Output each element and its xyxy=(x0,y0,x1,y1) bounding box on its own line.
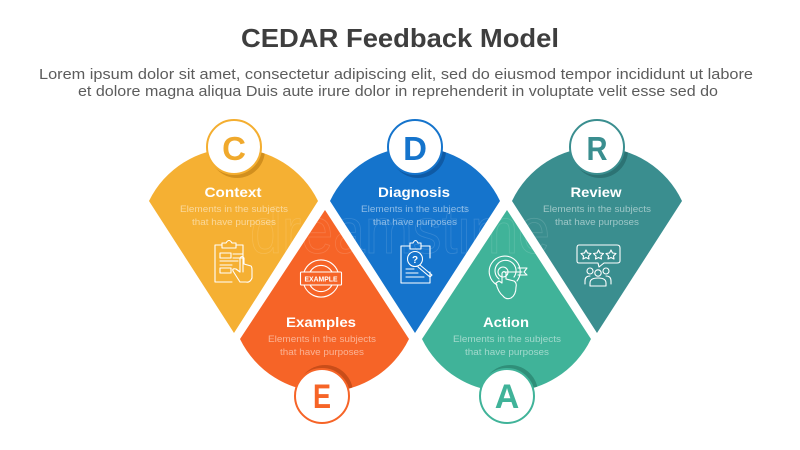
subtitle: Lorem ipsum dolor sit amet, consectetur adipiscing elit, sed do eiusmod tempor incididunt ut labore xyxy=(39,66,753,83)
review heading: Review xyxy=(570,184,622,200)
review description: that have purposes xyxy=(555,217,640,227)
review badge: R xyxy=(586,130,608,167)
examples heading: Examples xyxy=(286,314,356,330)
action shape xyxy=(422,210,591,392)
review shape xyxy=(512,147,682,333)
diagnosis badge: D xyxy=(403,130,427,167)
icon: example stamp: EXAMPLE xyxy=(304,274,338,284)
context shape xyxy=(149,148,318,333)
examples description xyxy=(268,334,377,357)
action description: that have purposes xyxy=(465,347,550,357)
examples badge xyxy=(295,365,353,423)
watermark: dreamstime xyxy=(250,195,550,267)
panel: diagnosis xyxy=(330,120,500,333)
subtitle: et dolore magna aliqua Duis aute irure dolor in reprehenderit in voluptate velit esse sed do xyxy=(78,83,718,100)
context description xyxy=(180,204,289,227)
diagnosis description xyxy=(361,204,470,227)
examples badge: E xyxy=(313,378,331,416)
action badge xyxy=(480,365,538,423)
icon: rating bubble and people xyxy=(577,245,620,286)
context badge xyxy=(207,120,265,178)
review badge xyxy=(570,120,628,178)
diagnosis description: Elements in the subjects xyxy=(361,204,470,214)
panel: action xyxy=(422,210,591,423)
diagnosis heading: Diagnosis xyxy=(378,184,450,200)
review description: Elements in the subjects xyxy=(543,204,652,214)
action description: Elements in the subjects xyxy=(453,334,562,344)
panel: context xyxy=(149,120,318,333)
context description: Elements in the subjects xyxy=(180,204,289,214)
icon: clipboard with magnifier xyxy=(401,240,432,283)
context badge: C xyxy=(222,130,246,167)
context heading: Context xyxy=(204,184,262,200)
examples shape xyxy=(240,210,409,392)
action description xyxy=(453,334,562,357)
icon: example stamp xyxy=(300,260,342,297)
question mark: ? xyxy=(412,255,418,266)
examples description: Elements in the subjects xyxy=(268,334,377,344)
review description xyxy=(543,204,652,227)
panel: review xyxy=(512,120,682,333)
diagnosis shape xyxy=(330,147,500,333)
icon: target with hand xyxy=(489,256,527,299)
subtitle xyxy=(39,66,753,100)
title: CEDAR Feedback Model xyxy=(241,23,559,53)
panel: examples xyxy=(240,210,409,423)
icon: clipboard with hand xyxy=(215,240,252,282)
context description: that have purposes xyxy=(192,217,277,227)
diagnosis description: that have purposes xyxy=(373,217,458,227)
action badge: A xyxy=(495,378,519,416)
action heading: Action xyxy=(483,314,529,330)
diagnosis badge xyxy=(388,120,446,178)
examples description: that have purposes xyxy=(280,347,365,357)
